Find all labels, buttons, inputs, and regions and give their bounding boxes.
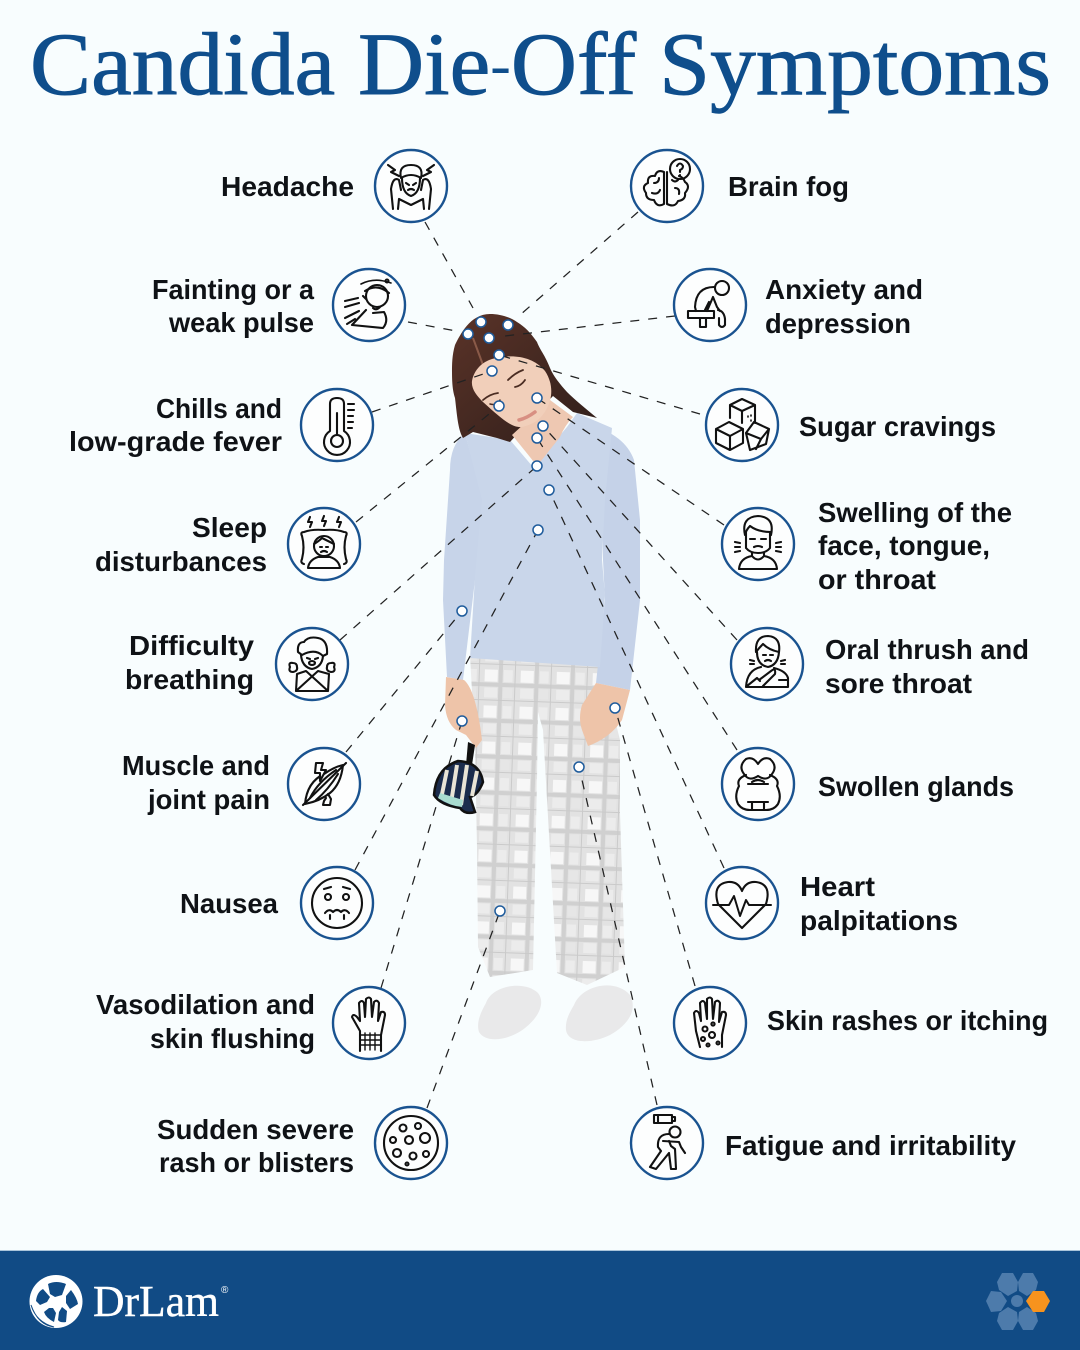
icon: swollen glands [722, 748, 794, 820]
label: Fainting or a weak pulse: Fainting or a [152, 274, 314, 305]
icon: hand with rash [674, 987, 746, 1059]
label: Chills and low-grade fever [69, 393, 282, 457]
icon: brain with question mark [631, 150, 703, 222]
label: Skin rashes or itching: Skin rashes or itching [767, 1005, 1048, 1036]
title: - [490, 32, 511, 98]
face [472, 356, 551, 427]
label: Brain fog: Brain fog [728, 171, 849, 202]
label: Vasodilation and skin flushing: Vasodilation and [96, 989, 315, 1020]
label: Swollen glands: Swollen glands [818, 771, 1014, 802]
pajama trousers [470, 655, 625, 985]
logo: DrLam: ® [221, 1285, 229, 1296]
icon: sleep disturbances [288, 508, 360, 580]
label: Swelling of the face, tongue, or throat: Swelling of the [818, 497, 1012, 528]
label: Sudden severe rash or blisters [157, 1114, 354, 1178]
label: Headache: Headache [221, 171, 354, 202]
label: Nausea: Nausea [180, 888, 278, 919]
label: Sugar cravings: Sugar cravings [799, 411, 996, 442]
shirt left sleeve [443, 433, 483, 680]
icon: sugar cubes [706, 389, 778, 461]
shirt right sleeve [590, 425, 640, 690]
label: Heart palpitations: palpitations [800, 905, 958, 936]
hair parting [473, 338, 483, 365]
flower emblem [986, 1273, 1050, 1330]
logo: DrLam: DrLam [93, 1277, 219, 1326]
label: Swelling of the face, tongue, or throat: face, tongue, [818, 530, 990, 561]
logo: DrLam [30, 1275, 229, 1328]
icon: fainting [333, 269, 405, 341]
icon: blisters [375, 1107, 447, 1179]
label: Swelling of the face, tongue, or throat: or throat [818, 564, 936, 595]
label: Oral thrush and sore throat: Oral thrush and [825, 634, 1029, 665]
hands [445, 677, 482, 748]
title: Candida Die [30, 16, 477, 114]
label: Difficulty breathing [125, 630, 254, 695]
label: Vasodilation and skin flushing [96, 989, 315, 1054]
icon: nausea face [301, 867, 373, 939]
connector lines [340, 212, 737, 1108]
label: Difficulty breathing: breathing [125, 664, 254, 695]
icon: hand flushing [333, 987, 405, 1059]
footer bar [0, 1250, 1080, 1350]
icon: headache [375, 150, 447, 222]
label: Oral thrush and sore throat: sore throat [825, 668, 972, 699]
label: Heart palpitations: Heart [800, 871, 875, 902]
label: Sleep disturbances [95, 512, 267, 577]
icon: fatigued person and battery [631, 1107, 703, 1179]
label: Vasodilation and skin flushing: skin flushing [150, 1023, 315, 1054]
label: Sudden severe rash or blisters: Sudden severe [157, 1114, 354, 1145]
woman figure [443, 314, 640, 1041]
label: Fainting or a weak pulse: weak pulse [168, 307, 314, 338]
neck [512, 400, 573, 466]
hair [452, 314, 597, 442]
label: Chills and low-grade fever: Chills and [156, 393, 282, 424]
label: Sleep disturbances: Sleep [192, 512, 267, 543]
label: Anxiety and depression [765, 274, 923, 339]
label: Heart palpitations [800, 871, 958, 936]
label: Difficulty breathing: Difficulty [129, 630, 254, 661]
icon: heart pulse [706, 867, 778, 939]
icon: muscle and joint pain [288, 748, 360, 820]
label: Anxiety and depression: Anxiety and [765, 274, 923, 305]
icon: difficulty breathing [276, 628, 348, 700]
label: Fatigue and irritability: Fatigue and irritability [725, 1130, 1016, 1161]
label: Fainting or a weak pulse [152, 274, 314, 338]
label: Muscle and joint pain: joint pain [147, 784, 270, 815]
icon: sore throat [731, 628, 803, 700]
title: Off Symptoms [511, 16, 1051, 114]
sleep mask [434, 742, 483, 813]
label: Sudden severe rash or blisters: rash or blisters [159, 1147, 354, 1178]
label: Oral thrush and sore throat [825, 634, 1029, 699]
slippers [478, 985, 633, 1041]
label: Muscle and joint pain: Muscle and [122, 750, 270, 781]
label: Swelling of the face, tongue, or throat [818, 497, 1012, 595]
body marker dots [457, 317, 620, 916]
label: Anxiety and depression: depression [765, 308, 911, 339]
icon: thermometer [301, 389, 373, 461]
label: Muscle and joint pain [122, 750, 270, 815]
label: Sleep disturbances: disturbances [95, 546, 267, 577]
shirt torso [465, 413, 612, 667]
icon: swollen face [722, 508, 794, 580]
icon: depressed person [674, 269, 746, 341]
label: Chills and low-grade fever: low-grade fever [69, 426, 282, 457]
facial features [483, 370, 535, 420]
